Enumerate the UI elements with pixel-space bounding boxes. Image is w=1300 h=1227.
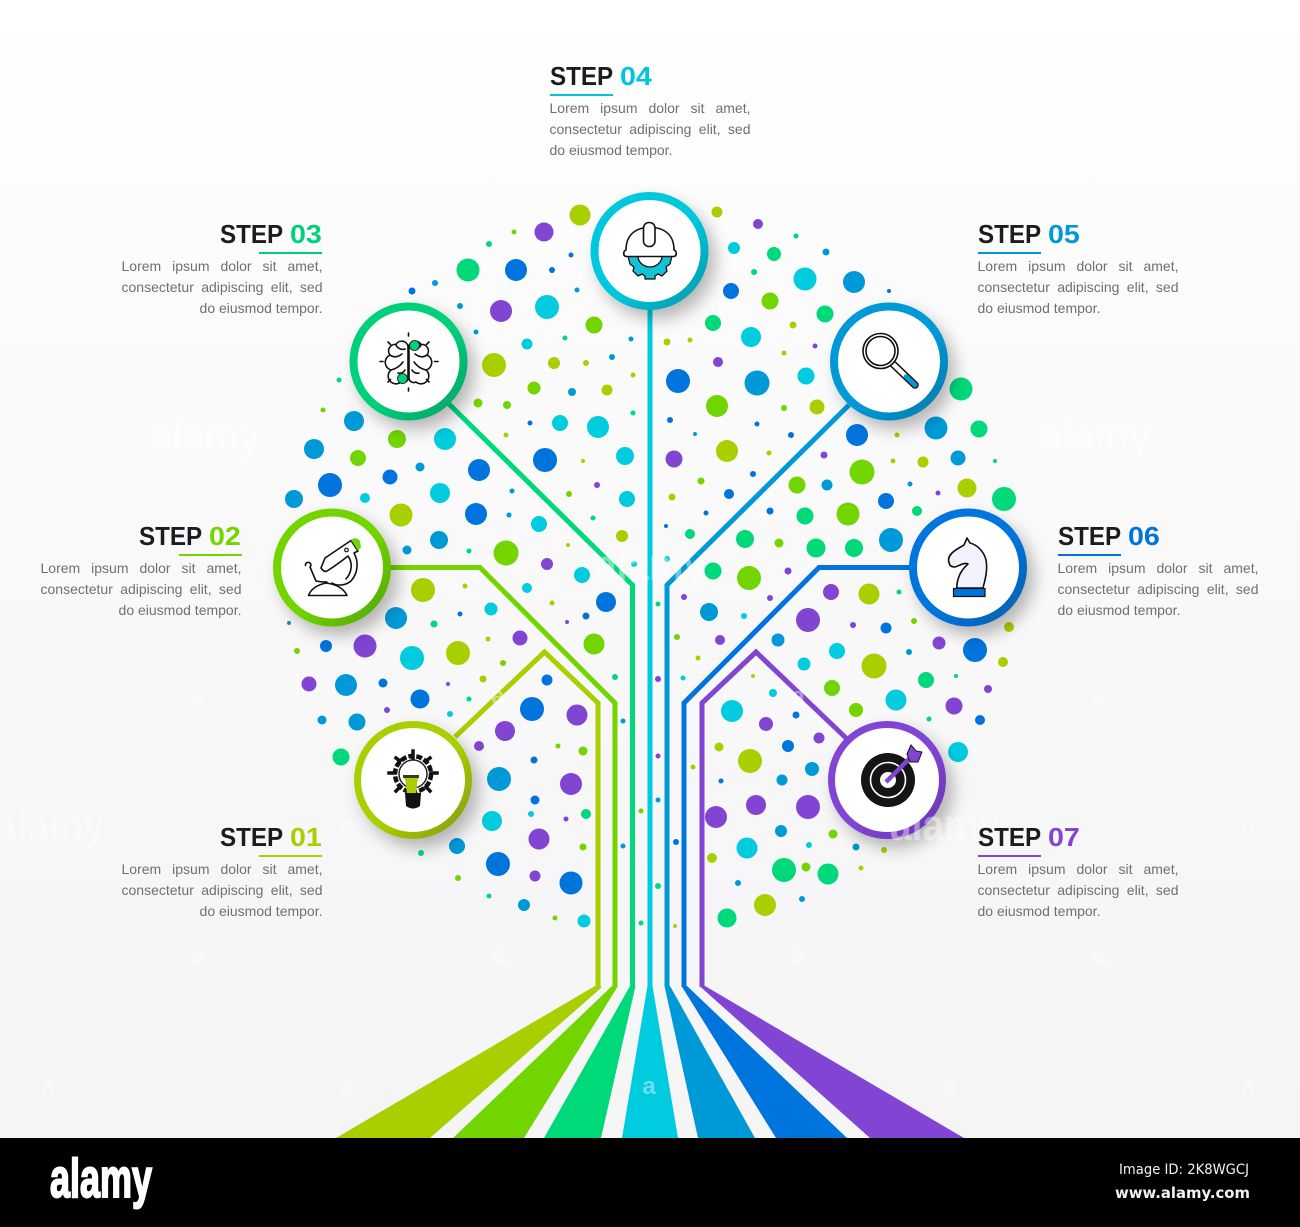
text: step 06: Lorem ipsum dolor sit amet, [1058, 560, 1258, 576]
text: step 04: consectetur adipiscing elit, sed [550, 121, 750, 137]
watermark: a [340, 293, 354, 320]
branch: step 03 [448, 403, 636, 1138]
icon: chess knight [949, 538, 987, 596]
text: step 03: consectetur adipiscing elit, sed [122, 278, 322, 294]
icon: target with arrow [861, 745, 922, 807]
watermark: a [1241, 293, 1255, 320]
text: step 02 [40, 520, 242, 618]
icon: microscope [305, 538, 361, 596]
node: step 05 magnifier [834, 306, 944, 416]
watermark: a [191, 683, 205, 710]
icon: brain [380, 333, 438, 391]
watermark: a [1091, 683, 1105, 710]
text: step 04: do eiusmod tempor. [550, 142, 672, 158]
text: step 02: consectetur adipiscing elit, sed [40, 580, 242, 596]
text: step 05: Lorem ipsum dolor sit amet, [978, 258, 1178, 274]
text: step 04 [550, 61, 750, 158]
text: step 05 [978, 218, 1178, 316]
text: step 07: do eiusmod tempor. [978, 903, 1100, 919]
watermark: alamy [1040, 411, 1150, 460]
text: step 03: 03 [290, 218, 322, 248]
footer image id: Image ID: 2K8WGCJ [1119, 1162, 1249, 1178]
watermark: a [791, 683, 805, 710]
footer url: www.alamy.com [1115, 1184, 1250, 1202]
text: step 01: STEP [220, 822, 283, 852]
watermark: a [1241, 553, 1255, 580]
text: step 06: consectetur adipiscing elit, sed [1058, 580, 1258, 596]
branch: step 06 [682, 568, 912, 1138]
text: step 01: do eiusmod tempor. [200, 903, 322, 919]
watermark: a [791, 163, 805, 190]
watermark: a [41, 553, 55, 580]
node: step 04 helmet [594, 196, 704, 306]
text: step 02: 02 [209, 520, 241, 550]
branch: step 07 [700, 652, 964, 1138]
text: step 07: STEP [978, 822, 1041, 852]
text: step 04: STEP [550, 61, 613, 91]
watermark: a [41, 1073, 55, 1100]
text: step 03 [122, 218, 322, 316]
text: step 06: 06 [1128, 520, 1160, 550]
text: step 02: STEP [139, 520, 202, 550]
text: step 05: consectetur adipiscing elit, sed [978, 278, 1178, 294]
text: step 04: Lorem ipsum dolor sit amet, [550, 100, 750, 116]
watermark: a [943, 1073, 957, 1100]
text: step 01: Lorem ipsum dolor sit amet, [122, 861, 322, 877]
watermark: a [1241, 1073, 1255, 1100]
text: step 07 [978, 822, 1178, 919]
text: step 07: 07 [1048, 822, 1080, 852]
text: step 06: do eiusmod tempor. [1058, 602, 1180, 618]
node: step 07 target [832, 724, 942, 836]
text: step 07: consectetur adipiscing elit, sed [978, 882, 1178, 898]
watermark: a [41, 293, 55, 320]
watermark: a [642, 1073, 656, 1100]
node: step 01 bulb [358, 724, 468, 836]
text: step 03: STEP [220, 218, 283, 248]
branch: step 01 [336, 652, 601, 1138]
text: step 04: 04 [620, 61, 652, 91]
watermark: a [340, 1073, 354, 1100]
text: step 03: Lorem ipsum dolor sit amet, [122, 258, 322, 274]
watermark: a [1091, 943, 1105, 970]
icon: helmet and gear [624, 222, 676, 279]
watermark: alamy [150, 411, 260, 460]
watermark: a [491, 943, 505, 970]
text: step 03: do eiusmod tempor. [200, 300, 322, 316]
text: step 05: do eiusmod tempor. [978, 300, 1100, 316]
icon: magnifying glass [863, 334, 915, 385]
text: step 06 [1058, 520, 1258, 618]
footer bar [0, 1138, 1300, 1227]
watermark: a [1241, 813, 1255, 840]
branch: step 04 [622, 306, 678, 1138]
node: step 02 microscope [277, 512, 387, 622]
text: step 05: 05 [1048, 218, 1080, 248]
watermark: a [191, 943, 205, 970]
branch: step 05 [664, 405, 849, 1138]
watermark: a [491, 683, 505, 710]
watermark: alamy [595, 541, 705, 590]
footer logo: alamy [50, 1147, 152, 1209]
text: step 01: consectetur adipiscing elit, sed [122, 882, 322, 898]
watermark: alamy [890, 801, 1000, 850]
dots: tree canopy [285, 204, 1016, 928]
watermark: a [41, 33, 55, 60]
watermark: alamy [890, 21, 1000, 70]
node: step 03 brain [354, 306, 464, 416]
watermark: a [943, 293, 957, 320]
watermark: a [340, 813, 354, 840]
text: step 06: STEP [1058, 520, 1121, 550]
watermark: a [791, 943, 805, 970]
node: step 06 knight [913, 512, 1023, 622]
icon: light bulb [389, 751, 437, 808]
text: step 05: STEP [978, 218, 1041, 248]
branch lines and trunk [336, 306, 964, 1138]
branch: step 02 [388, 568, 618, 1138]
watermark: a [1241, 33, 1255, 60]
watermark: a [191, 163, 205, 190]
watermark: a [340, 33, 354, 60]
text: step 02: Lorem ipsum dolor sit amet, [40, 560, 242, 576]
text: step 07: Lorem ipsum dolor sit amet, [978, 861, 1178, 877]
watermark: a [491, 163, 505, 190]
text: step 01: 01 [290, 822, 322, 852]
text: step 02: do eiusmod tempor. [119, 602, 242, 618]
watermark: a [1091, 163, 1105, 190]
text: step 01 [122, 822, 322, 919]
